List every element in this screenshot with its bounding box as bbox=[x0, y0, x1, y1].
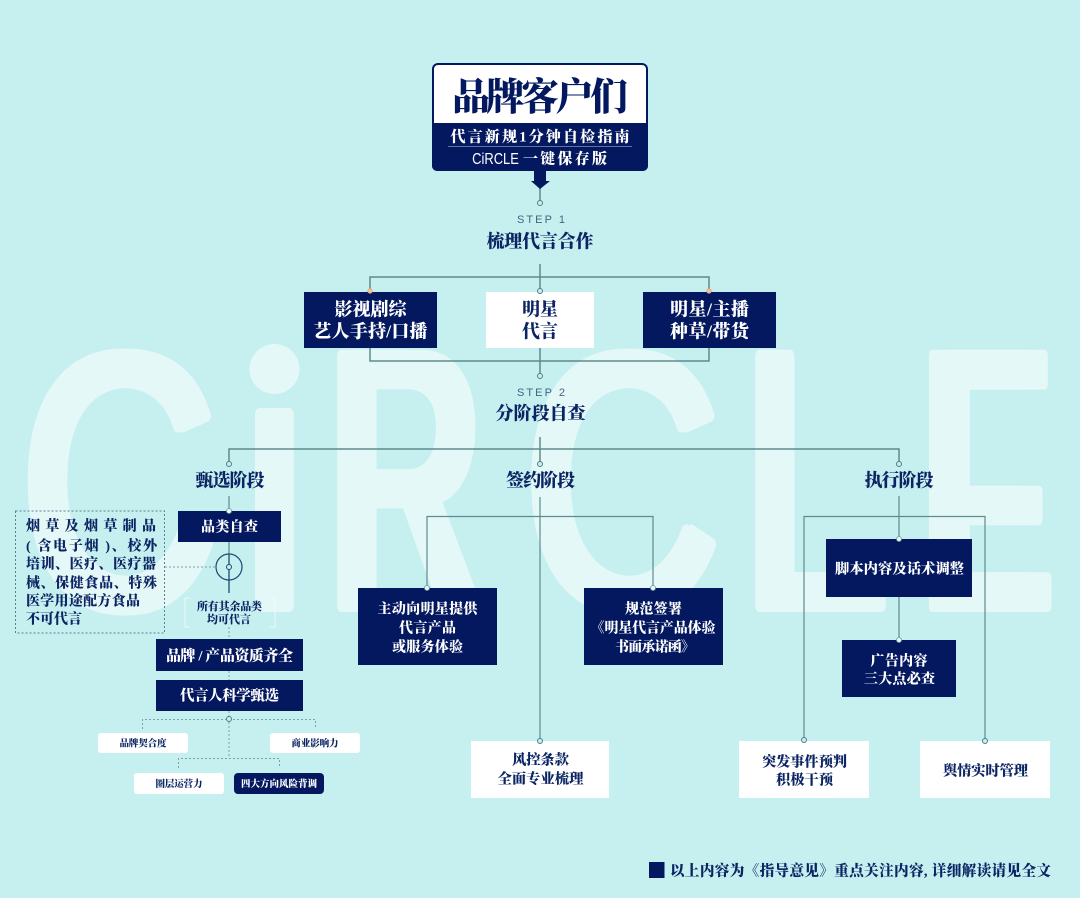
watermark wordmark: CiRCLE: R bbox=[324, 277, 474, 683]
dotted link to restriction note bbox=[165, 566, 216, 568]
box: celebrity endorsement bbox=[486, 292, 594, 348]
watermark wordmark: CiRCLE: E bbox=[935, 277, 1056, 683]
box: film and variety bbox=[304, 292, 437, 348]
watermark wordmark: CiRCLE: C bbox=[527, 281, 722, 683]
pill: community operation bbox=[134, 773, 224, 794]
watermark wordmark: CiRCLE: E bbox=[917, 277, 1038, 683]
connector lines: step 2 bbox=[229, 437, 985, 740]
watermark wordmark: CiRCLE: ı bbox=[230, 277, 319, 683]
box: streamer seeding: 种草/带货 bbox=[670, 320, 751, 342]
bracketed note: all other categories: 均可代言 bbox=[207, 612, 251, 626]
header card: 代言新规1分钟自检指南 bbox=[450, 128, 630, 146]
connector nodes: step 1 boxes bbox=[368, 288, 711, 378]
note: prohibited categories: 械、保健食品、特殊 bbox=[26, 574, 157, 591]
box: advertising content check: 三大点必查 bbox=[864, 670, 935, 687]
header card: 一键保存版 bbox=[523, 150, 607, 168]
connector node: four directions bbox=[226, 716, 232, 722]
box: provide product to celebrity: 代言产品 bbox=[399, 619, 456, 636]
step 1 heading: 梳理代言合作 bbox=[486, 230, 594, 252]
stage heading: selection: 甄选阶段 bbox=[196, 470, 264, 490]
pill: brand fit bbox=[98, 733, 188, 753]
watermark wordmark: CiRCLE: L bbox=[738, 278, 884, 684]
step 2 heading bbox=[496, 387, 586, 424]
stage heading: execution: 执行阶段 bbox=[864, 470, 934, 490]
box: provide product to celebrity: 或服务体验 bbox=[392, 638, 463, 655]
bracketed note: all other categories: 所有其余品类 bbox=[197, 599, 262, 613]
box: incident prediction: 突发事件预判 bbox=[762, 752, 847, 770]
pill: commercial influence bbox=[270, 733, 360, 753]
dotted spine under selection stage bbox=[142, 627, 316, 768]
box: scientific selection of endorser: 代言人科学甄选 bbox=[180, 687, 280, 705]
bracketed note: all other categories bbox=[185, 598, 275, 627]
box: advertising content check bbox=[842, 640, 956, 697]
box: incident prediction bbox=[739, 741, 869, 798]
box: incident prediction: 积极干预 bbox=[776, 770, 835, 788]
watermark wordmark: CiRCLE: L bbox=[744, 278, 890, 684]
box: written commitment letter: 《明星代言产品体验 bbox=[590, 619, 716, 636]
step 2 heading: 分阶段自查 bbox=[496, 402, 586, 424]
box: script and talking points bbox=[826, 539, 972, 597]
box: public opinion management: 舆情实时管理 bbox=[943, 761, 1029, 779]
pill: risk background check: 四大方向风险背调 bbox=[241, 778, 317, 790]
box: risk control clauses: 风控条款 bbox=[512, 750, 570, 768]
box: script and talking points: 脚本内容及话术调整 bbox=[835, 559, 965, 577]
watermark wordmark: CiRCLE: E bbox=[917, 277, 1038, 683]
step 2 heading: STEP 2 bbox=[517, 387, 565, 399]
box: celebrity endorsement: 明星 bbox=[522, 300, 558, 320]
pill: community operation: 圈层运营力 bbox=[156, 778, 202, 790]
watermark wordmark: CiRCLE: E bbox=[935, 277, 1056, 683]
box: scientific selection of endorser bbox=[156, 680, 303, 711]
box: risk control clauses: 全面专业梳理 bbox=[498, 770, 584, 788]
header card: 品牌客户们 bbox=[452, 76, 628, 119]
note: prohibited categories: 培训、医疗、医疗器 bbox=[26, 555, 156, 572]
watermark wordmark: CiRCLE: C bbox=[18, 281, 213, 683]
connector nodes: stages bbox=[226, 462, 902, 466]
box: category self-check bbox=[178, 511, 281, 542]
box: public opinion management bbox=[920, 741, 1050, 798]
box: streamer seeding: 明星/主播 bbox=[670, 298, 749, 320]
pill: commercial influence: 商业影响力 bbox=[292, 738, 338, 750]
box: film and variety: 影视剧综 bbox=[334, 298, 408, 320]
watermark wordmark: CiRCLE: C bbox=[522, 281, 717, 683]
watermark wordmark: CiRCLE: E bbox=[935, 305, 1056, 711]
step 1 heading: STEP 1 bbox=[517, 214, 565, 226]
stage heading: signing: 签约阶段 bbox=[506, 470, 575, 490]
box: brand and product qualifications bbox=[156, 639, 303, 671]
watermark wordmark: CiRCLE bbox=[28, 344, 1052, 616]
box: brand and product qualifications: 品牌 / 产品资质齐全 bbox=[166, 646, 293, 664]
watermark wordmark: CiRCLE: C bbox=[24, 281, 218, 683]
header card bbox=[432, 64, 648, 171]
note: prohibited categories bbox=[16, 511, 164, 633]
connector lines: step 1 bbox=[370, 188, 709, 374]
box: provide product to celebrity: 主动向明星提供 bbox=[378, 600, 480, 617]
note: prohibited categories: 烟草及烟草制品 bbox=[25, 517, 156, 534]
box: film and variety: 艺人手持/口播 bbox=[314, 320, 428, 342]
arrow from header bbox=[531, 171, 550, 189]
step 1 heading bbox=[486, 214, 594, 252]
header card: CiRCLE bbox=[472, 151, 519, 168]
watermark wordmark: CiRCLE: E bbox=[917, 305, 1038, 711]
connector nodes: lower boxes bbox=[226, 508, 988, 744]
box: written commitment letter: 书面承诺函》 bbox=[615, 638, 695, 655]
pill: risk background check bbox=[234, 773, 324, 794]
box: risk control clauses bbox=[471, 741, 609, 798]
watermark wordmark: CiRCLE: R bbox=[336, 277, 487, 683]
box: celebrity endorsement: 代言 bbox=[522, 320, 558, 342]
box: streamer seeding bbox=[643, 292, 776, 348]
footer note: 以上内容为《指导意见》重点关注内容, 详细解读请见全文 bbox=[670, 862, 1051, 880]
pill: brand fit: 品牌契合度 bbox=[120, 738, 167, 750]
gate icon: circle with node bbox=[216, 554, 242, 593]
note: prohibited categories: 不可代言 bbox=[26, 610, 82, 627]
box: advertising content check: 广告内容 bbox=[870, 652, 928, 669]
note: prohibited categories: 医学用途配方食品 bbox=[26, 592, 140, 609]
connector node: step 1 bbox=[538, 200, 542, 206]
box: written commitment letter: 规范签署 bbox=[625, 600, 682, 617]
note: prohibited categories: ( 含电子烟 )、校外 bbox=[26, 537, 159, 554]
box: category self-check: 品类自查 bbox=[201, 518, 258, 535]
box: written commitment letter bbox=[584, 588, 723, 665]
box: provide product to celebrity bbox=[358, 588, 497, 665]
